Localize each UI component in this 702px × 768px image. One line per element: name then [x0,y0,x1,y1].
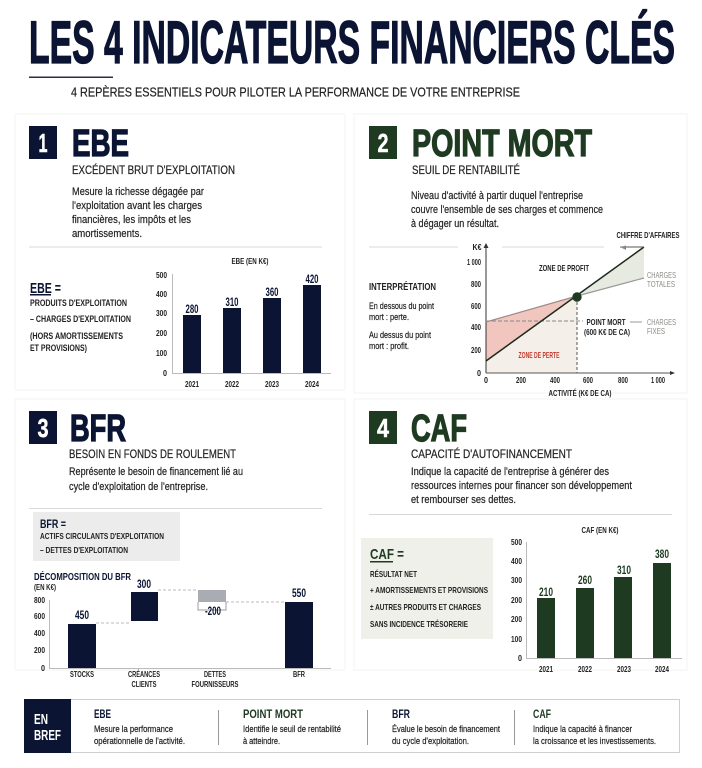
break-even chart: 600 [583,375,593,385]
EBE bar chart: 2024 [305,379,319,389]
CAF formula box: SANS INCIDENCE TRÉSORERIE [370,619,468,629]
break-even chart: 1 000 [467,257,481,267]
interpretation text: En dessous du point [369,301,434,311]
CAF bar chart: 500 [511,537,522,547]
interpretation text: INTERPRÉTATION [369,280,436,293]
CAF bar chart: 380 [655,547,669,561]
break-even chart: 600 [471,301,481,311]
EBE formula: EBE = [30,280,61,297]
break-even chart: 200 [516,375,526,385]
CAF bar chart: 2022 [578,664,592,674]
summary: BFR [392,707,500,746]
en bref label: EN [34,711,48,728]
break-even chart: ZONE DE PROFIT [539,263,590,273]
break-even chart: 0 [484,375,488,385]
CAF bar chart: CAF (EN K€) [582,525,619,535]
CAF bar chart: 400 [511,556,522,566]
CAF number badge [369,411,397,444]
BFR description: Représente le besoin de financement lié au [69,466,243,478]
summary: point mort: à atteindre. [243,736,280,746]
CAF formula box: RÉSULTAT NET [370,569,418,579]
interpretation text: mort : perte. [369,312,409,322]
break-even chart: K€ [472,242,482,252]
CAF bar chart: 200 [511,614,522,624]
CAF bar chart: 2021 [539,664,553,674]
summary: EBE: Mesure la performance [94,724,173,734]
EBE bar chart: 0 [163,368,167,378]
summary: BFR: du cycle d'exploitation. [392,736,469,746]
BFR waterfall chart: STOCKS [70,670,94,679]
summary band: en bref [24,699,680,753]
summary: CAF: CAF [533,707,551,721]
EBE bar chart: 2023 [265,379,279,389]
break-even chart: ZONE DE PERTE [518,350,560,360]
BFR number badge [29,411,57,444]
CAF description: ressources internes pour financer son développement [411,480,632,492]
CAF description: Indique la capacité de l'entreprise à générer des [411,466,609,478]
summary: EBE: opérationnelle de l'activité. [94,736,185,746]
en bref label: BREF [34,727,61,744]
BFR waterfall chart: DETTES [204,670,226,679]
summary: point mort: Identifie le seuil de rentabilité [243,724,341,734]
EBE description: Mesure la richesse dégagée par [72,186,204,198]
summary: CAF: Indique la capacité à financer [533,724,632,734]
EBE description: amortissements. [72,228,142,240]
point mort heading: POINT MORT [412,123,592,165]
CAF bar chart: 260 [578,573,592,587]
CAF description [411,466,632,506]
CAF formula box: + AMORTISSEMENTS ET PROVISIONS [370,585,488,595]
CAF formula box: CAF = [370,546,404,563]
BFR waterfall chart: 800 [34,595,45,605]
summary: BFR: Évalue le besoin de financement [392,724,500,734]
panel: BFR [15,399,345,689]
summary: point mort [243,707,341,746]
break-even chart: ACTIVITÉ (K€ DE CA) [548,388,612,398]
EBE subheading: EXCÉDENT BRUT D'EXPLOITATION [72,164,235,177]
CAF number badge: 4 [377,413,389,443]
EBE formula [30,280,131,353]
BFR formula box: – DETTES D'EXPLOITATION [40,545,128,555]
BFR waterfall chart: 550 [292,586,306,600]
BFR heading: BFR [70,408,126,450]
EBE description: financières, les impôts et les [72,214,191,226]
EBE number badge: 1 [38,128,48,158]
EBE number badge [29,126,57,159]
CAF bar chart: 2023 [617,664,631,674]
CAF bar chart: 310 [617,563,631,577]
EBE bar chart: 420 [306,272,319,286]
panel: point mort [354,114,687,398]
BFR formula box [33,512,180,561]
EBE formula: (HORS AMORTISSEMENTS [30,331,123,341]
BFR waterfall chart: FOURNISSEURS [192,680,239,689]
BFR waterfall chart: 450 [75,608,89,622]
point mort description: couvre l'ensemble de ses charges et commence [411,204,603,216]
BFR formula box: BFR = [40,517,66,531]
EBE formula: PRODUITS D'EXPLOITATION [30,298,127,308]
CAF formula box [361,538,493,639]
EBE heading: EBE [72,123,129,165]
EBE description [72,186,204,240]
CAF subheading: CAPACITÉ D'AUTOFINANCEMENT [411,448,572,461]
title rule [29,76,113,78]
EBE bar chart: 2021 [185,379,199,389]
CAF heading: CAF [411,408,467,450]
summary: EBE: EBE [94,707,111,721]
EBE formula: – CHARGES D'EXPLOITATION [30,314,131,324]
BFR waterfall chart: BFR [293,670,305,679]
EBE bar chart: 300 [156,308,167,318]
point mort number badge [369,126,397,159]
break-even chart: CHARGES [647,317,676,327]
CAF bar chart: 2024 [655,664,669,674]
break-even chart: TOTALES [647,279,675,289]
BFR waterfall chart: (EN K€) [34,583,56,592]
interpretation text [369,280,436,351]
EBE bar chart: 200 [156,328,167,338]
BFR waterfall chart: 0 [41,663,45,673]
break-even chart: 1 000 [651,375,665,385]
BFR subheading: BESOIN EN FONDS DE ROULEMENT [69,449,236,461]
CAF description: et rembourser ses dettes. [411,494,516,506]
point mort description [411,190,603,230]
panel: EBE [15,114,345,390]
EBE bar chart: 500 [156,270,167,280]
break-even chart [467,230,680,398]
panel: CAF [354,399,687,674]
CAF bar chart [511,525,682,674]
CAF formula box: ± AUTRES PRODUITS ET CHARGES [370,602,481,612]
point mort description: Niveau d'activité à partir duquel l'entreprise [411,190,583,202]
EBE description: l'exploitation avant les charges [72,200,202,212]
summary: CAF: la croissance et les investissements. [533,736,656,746]
interpretation text: Au dessus du point [369,330,431,340]
CAF bar chart: 300 [511,575,522,585]
point mort description: à dégager un résultat. [411,218,499,230]
break-even chart: FIXES [647,326,665,336]
BFR number badge: 3 [38,413,48,443]
EBE bar chart: 360 [266,285,279,299]
BFR waterfall chart: CLIENTS [132,680,157,689]
break-even chart: 200 [471,345,481,355]
CAF bar chart: 0 [518,653,522,663]
BFR waterfall chart: 400 [34,628,45,638]
break-even chart: 400 [550,375,560,385]
summary: point mort: POINT MORT [243,707,304,721]
break-even chart: 800 [618,375,628,385]
EBE bar chart: 100 [156,348,167,358]
BFR waterfall chart [34,570,331,689]
BFR waterfall chart: 300 [137,577,151,591]
EBE bar chart: EBE (EN K€) [232,256,269,266]
break-even chart: 400 [471,322,481,332]
CAF bar chart: 210 [539,585,553,599]
BFR description: cycle d'exploitation de l'entreprise. [69,481,208,493]
break-even chart: 800 [471,279,481,289]
BFR description [69,466,243,493]
en bref label [24,699,71,753]
break-even chart: 0 [477,368,481,378]
subtitle: 4 REPÈRES ESSENTIELS POUR PILOTER LA PERFORMANCE DE VOTRE ENTREPRISE [71,84,520,100]
EBE bar chart: 280 [186,302,199,316]
BFR waterfall chart: 200 [34,645,45,655]
CAF bar chart: 100 [511,634,522,644]
point mort number badge: 2 [378,128,388,158]
BFR waterfall chart: DÉCOMPOSITION DU BFR [34,570,131,583]
EBE bar chart: 2022 [225,379,239,389]
break-even chart: POINT MORT [586,317,626,327]
break-even chart: (600 K€ DE CA) [584,327,630,337]
summary: BFR: BFR [392,707,410,721]
EBE bar chart: 400 [156,289,167,299]
CAF bar chart: 200 [511,595,522,605]
BFR formula box: ACTIFS CIRCULANTS D'EXPLOITATION [40,531,164,541]
BFR waterfall chart: 600 [34,611,45,621]
point mort subheading: SEUIL DE RENTABILITÉ [412,164,520,177]
interpretation text: mort : profit. [369,341,409,351]
EBE bar chart [156,256,331,389]
summary: CAF [533,707,656,746]
summary: EBE [94,707,185,746]
break-even chart: CHARGES [647,270,676,280]
BFR waterfall chart: -200 [205,604,221,618]
BFR waterfall chart: CRÉANCES [128,670,160,679]
EBE formula: ET PROVISIONS) [30,343,87,353]
EBE bar chart: 310 [226,295,239,309]
